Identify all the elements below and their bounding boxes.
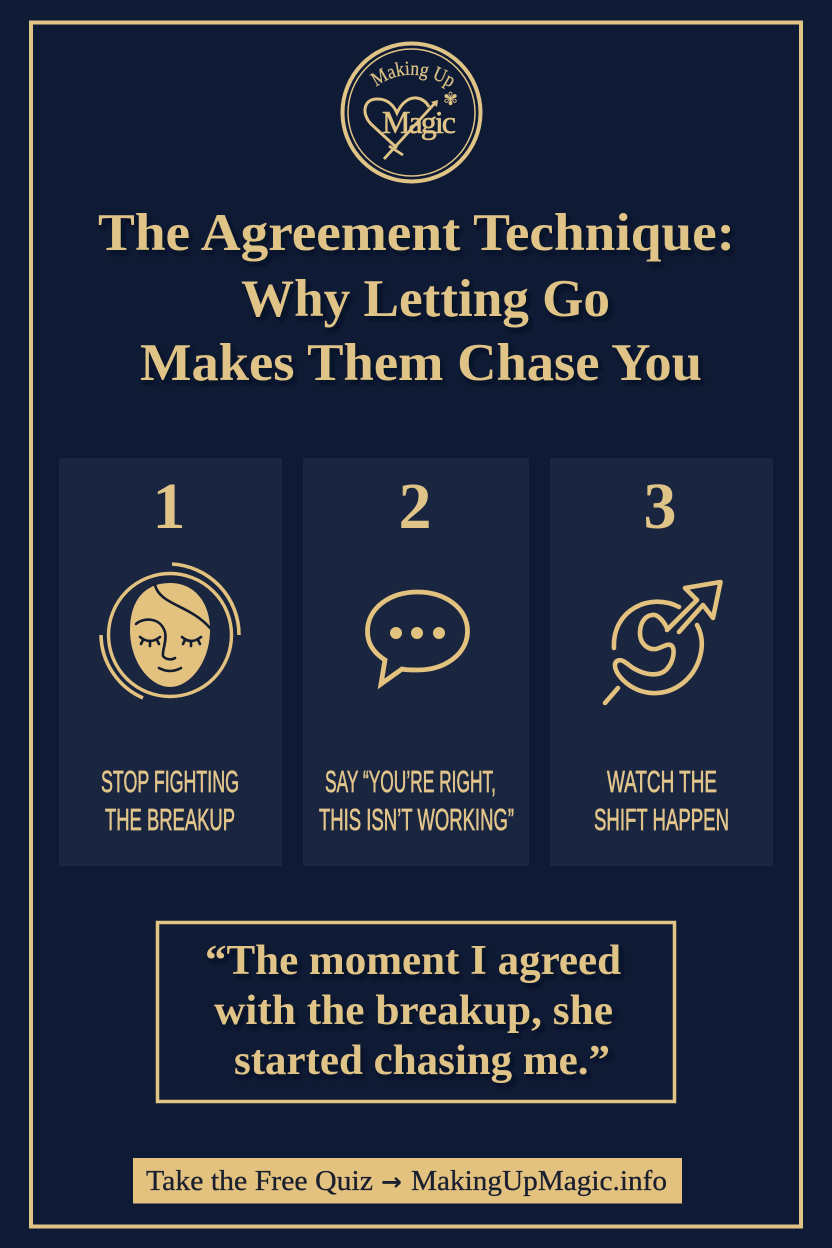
step 3 label: WATCH THE	[607, 764, 717, 799]
call to action button: MakingUpMagic.info	[411, 1165, 667, 1197]
title: The Agreement Technique:	[98, 204, 735, 262]
step 1 label: STOP FIGHTING	[101, 764, 239, 799]
panel: step 1	[59, 458, 282, 866]
step 3 label	[594, 764, 729, 837]
step 1 label	[101, 764, 239, 837]
quote text	[205, 938, 621, 1084]
step number 2: 2	[398, 470, 432, 543]
title	[98, 204, 735, 392]
step 2 label: SAY “YOU’RE RIGHT,	[325, 764, 496, 799]
logo sparkle: ✾	[443, 89, 458, 110]
step number 1: 1	[152, 470, 186, 543]
icon: swirl with arrow	[605, 582, 720, 703]
step 2 label	[319, 764, 514, 837]
logo arrow	[384, 103, 435, 159]
call to action button	[133, 1158, 682, 1204]
panel: step 3	[550, 458, 773, 866]
step 1 label: THE BREAKUP	[105, 802, 235, 837]
quote text: with the breakup, she	[214, 988, 613, 1034]
icon: face with closed eyes	[101, 564, 239, 698]
logo text: Magic: Magic	[382, 104, 456, 140]
call to action button: →	[381, 1168, 402, 1196]
icon: speech bubble	[368, 592, 468, 684]
call to action button: Take the Free Quiz	[146, 1165, 373, 1197]
logo badge	[340, 42, 482, 184]
step 3 label: SHIFT HAPPEN	[594, 802, 729, 837]
quote text: started chasing me.”	[234, 1038, 610, 1084]
quote text: “The moment I agreed	[205, 938, 621, 984]
panel: step 2	[303, 458, 529, 866]
quote box	[158, 922, 674, 1102]
step 2 label: THIS ISN’T WORKING”	[319, 802, 514, 837]
title: Makes Them Chase You	[140, 334, 702, 392]
logo heart	[365, 98, 429, 148]
step number 3: 3	[644, 470, 676, 543]
logo text: Making Up: Making Up	[370, 62, 454, 90]
title: Why Letting Go	[241, 270, 610, 328]
